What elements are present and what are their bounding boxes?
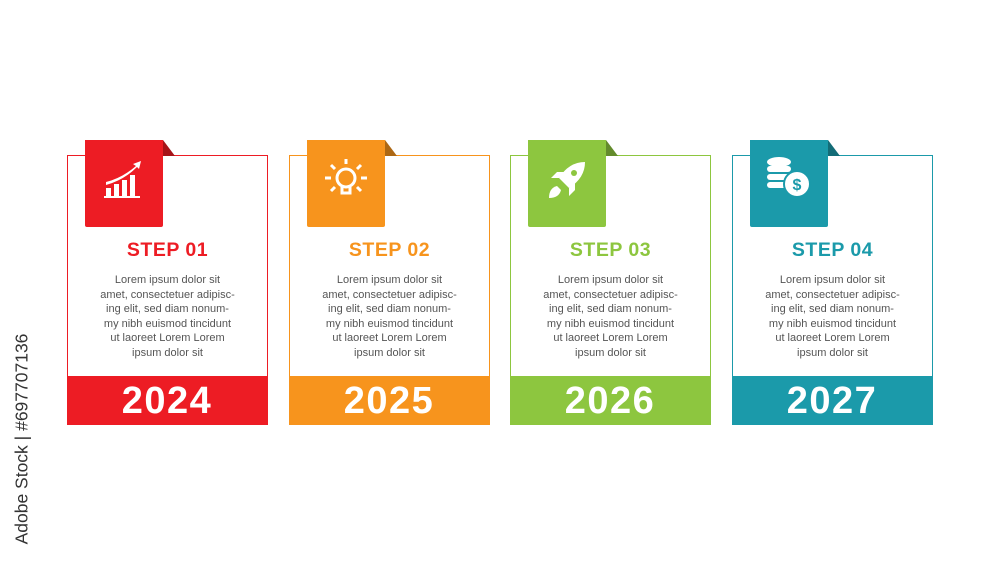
heading: STEP 02 xyxy=(349,239,430,261)
body text: my nibh euismod tincidunt xyxy=(769,318,896,330)
body text: my nibh euismod tincidunt xyxy=(326,318,453,330)
watermark credit: Adobe Stock | #697707136 xyxy=(12,334,32,544)
body text: ipsum dolor sit xyxy=(575,346,646,358)
card: step 02 xyxy=(289,155,490,424)
year: 2025 xyxy=(344,380,434,422)
body text: Lorem ipsum dolor sit xyxy=(558,274,663,286)
body text: Lorem ipsum dolor sit xyxy=(780,274,885,286)
body text: ing elit, sed diam nonum- xyxy=(106,303,229,315)
year xyxy=(732,376,932,424)
body text: amet, consectetuer adipisc- xyxy=(100,288,235,300)
body text xyxy=(100,274,235,358)
heading: STEP 04 xyxy=(792,239,873,261)
body text: ut laoreet Lorem Lorem xyxy=(775,332,890,344)
body text: ing elit, sed diam nonum- xyxy=(771,303,894,315)
year xyxy=(66,376,268,424)
heading: STEP 01 xyxy=(127,239,208,261)
body text: my nibh euismod tincidunt xyxy=(104,318,231,330)
tab icon xyxy=(85,140,163,227)
body text: ipsum dolor sit xyxy=(354,346,425,358)
card: step 04 xyxy=(732,155,933,424)
tab icon xyxy=(750,140,828,227)
year: 2024 xyxy=(122,380,212,422)
body text: amet, consectetuer adipisc- xyxy=(543,288,678,300)
year: 2027 xyxy=(787,380,877,422)
body text: amet, consectetuer adipisc- xyxy=(322,288,457,300)
body text: ut laoreet Lorem Lorem xyxy=(110,332,225,344)
year: 2026 xyxy=(565,380,655,422)
body text xyxy=(543,274,678,358)
body text: amet, consectetuer adipisc- xyxy=(765,288,900,300)
card: step 03 xyxy=(510,155,711,424)
heading: STEP 03 xyxy=(570,239,651,261)
tab icon: $ xyxy=(793,177,802,194)
body text: ing elit, sed diam nonum- xyxy=(549,303,672,315)
tab icon xyxy=(528,140,606,227)
body text: Lorem ipsum dolor sit xyxy=(115,274,220,286)
body text: ipsum dolor sit xyxy=(132,346,203,358)
body text: ut laoreet Lorem Lorem xyxy=(553,332,668,344)
body text xyxy=(765,274,900,358)
card: step 01 xyxy=(67,155,268,424)
body text xyxy=(322,274,457,358)
year xyxy=(510,376,710,424)
tab icon xyxy=(307,140,385,227)
body text: ipsum dolor sit xyxy=(797,346,868,358)
body text: Lorem ipsum dolor sit xyxy=(337,274,442,286)
body text: my nibh euismod tincidunt xyxy=(547,318,674,330)
year xyxy=(288,376,490,424)
body text: ing elit, sed diam nonum- xyxy=(328,303,451,315)
body text: ut laoreet Lorem Lorem xyxy=(332,332,447,344)
